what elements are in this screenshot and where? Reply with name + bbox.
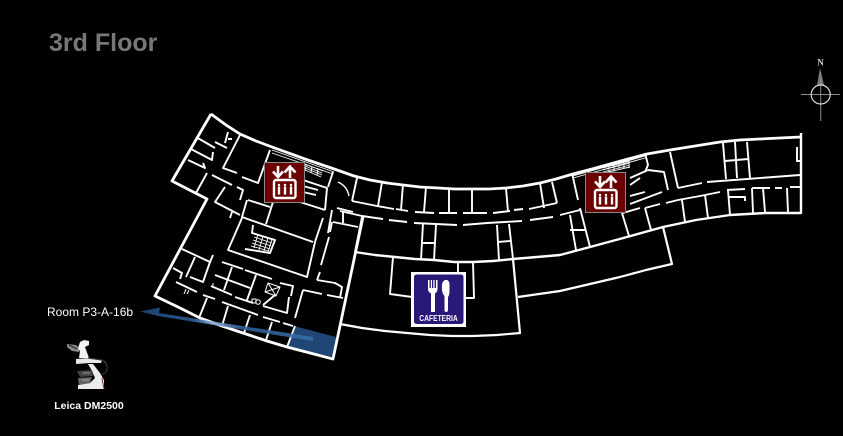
icon: elevator west [264, 162, 304, 202]
title: 3rd Floor [49, 29, 158, 57]
floor plan [155, 114, 801, 359]
outer walls [155, 114, 801, 359]
instrument label: Leica DM2500 [54, 400, 124, 412]
cafeteria walls [390, 257, 474, 298]
route arrow to room [140, 308, 313, 341]
room label: Room P3-A-16b [47, 305, 133, 319]
icon: north compass: N [817, 58, 824, 68]
stairs and double walls [251, 150, 645, 252]
fork [428, 280, 438, 312]
icon: elevator east [586, 172, 626, 212]
highlighted room [287, 326, 336, 357]
small wall symbols [184, 283, 280, 304]
elevator passengers [278, 184, 292, 194]
icon: north compass [801, 58, 840, 121]
west wing rooms [188, 132, 232, 168]
icon: cafeteria sign [411, 272, 466, 327]
east rooms [352, 178, 557, 213]
elevator passengers [599, 194, 613, 204]
icon: microscope [67, 340, 107, 389]
icon: cafeteria sign: CAFETERIA [419, 314, 458, 323]
knife [442, 280, 450, 312]
inner walls: east wing corridor [173, 132, 800, 347]
